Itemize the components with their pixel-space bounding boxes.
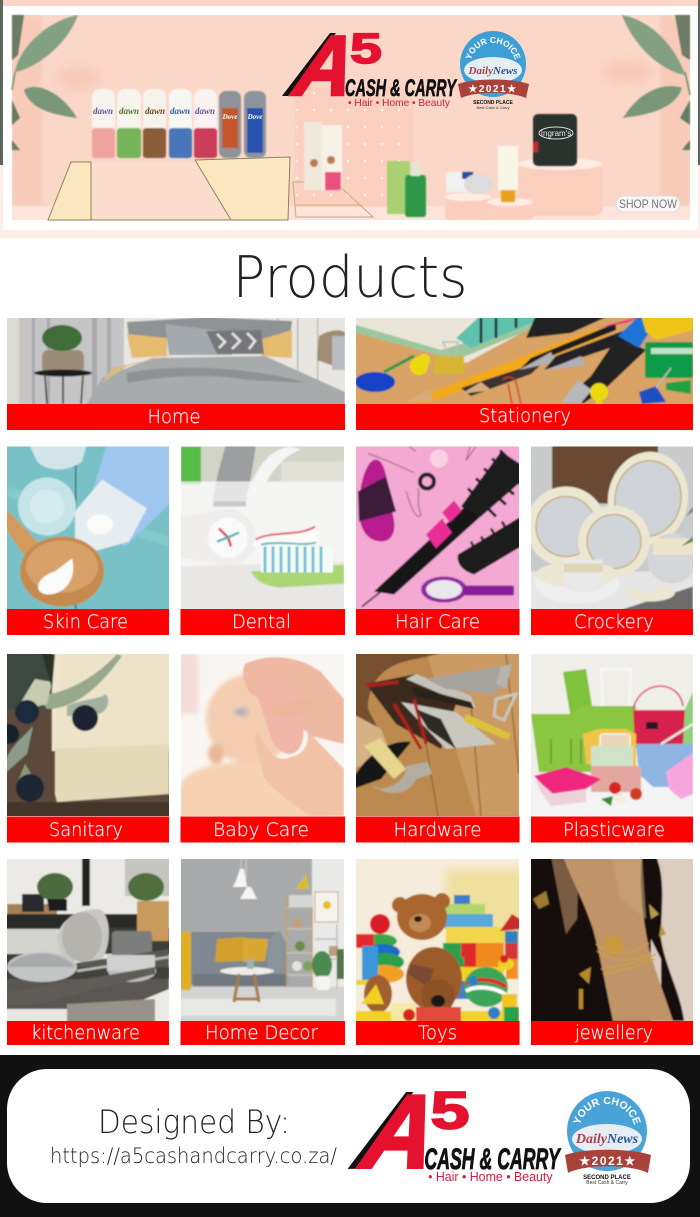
tile: Hair Care xyxy=(353,444,522,635)
label: Baby Care: Baby Care xyxy=(213,820,309,841)
photo: pots and pans xyxy=(7,859,169,1021)
logo: A5 Cash & Carry footer: • Hair • Home • Beauty xyxy=(428,1169,553,1184)
label: kitchenware xyxy=(7,1021,169,1045)
photo: living room xyxy=(181,859,344,1021)
label: Plasticware xyxy=(531,816,693,842)
bottle labels xyxy=(93,106,262,121)
label: Plasticware: Plasticware xyxy=(563,820,665,841)
tile: Dental xyxy=(178,444,347,635)
logo: A5 Cash & Carry xyxy=(281,19,457,114)
logo: A5 Cash & Carry: • Hair • Home • Beauty xyxy=(348,97,451,109)
tile: kitchenware xyxy=(4,856,172,1045)
logo: A5 Cash & Carry: 5 xyxy=(350,25,382,73)
logo: A5 Cash & Carry footer: CASH & CARRY xyxy=(424,1143,561,1176)
label: Stationery xyxy=(356,404,693,430)
label: Crockery: Crockery xyxy=(574,612,654,633)
bottles: dawn lotions xyxy=(92,89,266,158)
label: Home Decor xyxy=(180,1021,345,1045)
photo: toothpaste and brush xyxy=(181,446,344,609)
label: Sanitary: Sanitary xyxy=(49,820,123,841)
panel: hero banner xyxy=(0,0,700,238)
badge: your choice 2021: YOUR CHOICE xyxy=(465,37,521,60)
product: green cleanser xyxy=(387,161,426,217)
bottle labels: dawn xyxy=(93,106,113,116)
label: Toys xyxy=(356,1021,520,1045)
label: Toys: Toys xyxy=(418,1023,457,1044)
label: kitchenware: kitchenware xyxy=(31,1023,140,1044)
label: Dental: Dental xyxy=(232,612,291,633)
glass tray xyxy=(293,182,373,217)
label: jewellery xyxy=(531,1021,693,1045)
photo: dinner set xyxy=(531,446,693,609)
photo: baby foot in hands xyxy=(181,654,344,816)
display platforms xyxy=(48,157,290,220)
tile: Home Decor xyxy=(178,856,347,1045)
badge: your choice 2021 footer: Best Cash & Carry xyxy=(586,1180,628,1186)
logo: A5 Cash & Carry footer: 5 xyxy=(431,1083,470,1141)
tile: Crockery xyxy=(526,444,697,635)
icon: right leaves xyxy=(622,15,690,150)
label: Hair Care: Hair Care xyxy=(395,612,480,633)
frame xyxy=(3,6,698,230)
badge: your choice 2021 xyxy=(458,31,529,110)
label: Skin Care: Skin Care xyxy=(43,612,128,633)
badge: your choice 2021: Best Cash & Carry xyxy=(476,105,510,110)
logo: A5 Cash & Carry footer: A xyxy=(346,1074,459,1191)
bottle labels: dawn xyxy=(145,106,165,116)
bottle labels: dawn xyxy=(195,106,215,116)
tile: Hardware xyxy=(353,651,522,842)
label: Home Decor: Home Decor xyxy=(205,1023,318,1044)
photo: plastic containers xyxy=(531,654,693,816)
photo: pens and pencils xyxy=(356,318,693,404)
label: Skin Care xyxy=(7,609,169,635)
product: yellow tube xyxy=(498,146,518,202)
label: Hardware xyxy=(356,816,520,842)
badge: your choice 2021 footer: SECOND PLACE xyxy=(583,1175,631,1181)
product: Ingram's jar xyxy=(533,114,577,166)
logo: A5 Cash & Carry footer xyxy=(346,1074,561,1191)
label: Sanitary xyxy=(7,816,169,842)
badge: your choice 2021 footer: DailyNews xyxy=(575,1132,639,1147)
badge: your choice 2021 footer: YOUR CHOICE xyxy=(573,1097,641,1125)
label: Hardware: Hardware xyxy=(394,820,482,841)
tile: Sanitary xyxy=(0,651,172,842)
label: Crockery xyxy=(531,609,693,635)
tile: jewellery xyxy=(528,856,696,1045)
text: website URL: https://a5cashandcarry.co.za/ xyxy=(50,1144,337,1168)
label: Dental xyxy=(180,609,345,635)
peach cylinders xyxy=(445,158,603,220)
tile: Plasticware xyxy=(528,651,696,842)
bottle labels: dawn xyxy=(119,106,139,116)
logo: A5 Cash & Carry: A xyxy=(281,19,373,114)
label: Baby Care xyxy=(180,816,345,842)
label: Stationery: Stationery xyxy=(479,406,571,427)
icon: left leaves xyxy=(12,15,78,150)
panel: footer xyxy=(0,1055,700,1217)
tile: Home xyxy=(4,315,348,430)
tile: Toys xyxy=(353,856,526,1045)
tile: Skin Care xyxy=(4,444,172,635)
badge: your choice 2021 footer xyxy=(565,1091,651,1186)
bottle labels: dawn xyxy=(170,106,190,116)
product: soap xyxy=(446,172,492,194)
photo: teddy bear and blocks xyxy=(356,859,519,1021)
photo: hair tools xyxy=(356,446,519,609)
label: jewellery: jewellery xyxy=(574,1023,653,1044)
jar label: Ingram's xyxy=(541,129,571,138)
tile: Baby Care xyxy=(178,651,347,842)
badge: your choice 2021: SECOND PLACE xyxy=(473,100,514,106)
jar label xyxy=(539,127,573,139)
bottle labels: Dove xyxy=(247,113,262,121)
photo: soap and olives xyxy=(7,654,169,816)
logo: A5 Cash & Carry: CASH & CARRY xyxy=(345,75,457,102)
product: fairness cream boxes xyxy=(304,122,342,190)
badge: your choice 2021: DailyNews xyxy=(468,65,517,77)
tile: Stationery xyxy=(353,315,696,430)
button: shop now: SHOP NOW xyxy=(619,197,678,211)
badge: your choice 2021 footer: ★2021★ xyxy=(579,1154,637,1168)
photo: tools on wood xyxy=(356,654,519,816)
text: designed by: Designed By: xyxy=(98,1103,290,1141)
label: Home: Home xyxy=(148,407,200,428)
photo: bedroom xyxy=(7,318,345,404)
bottle labels: Dove xyxy=(222,113,237,121)
heading: Products: Products xyxy=(232,245,468,311)
label: Hair Care xyxy=(356,609,520,635)
pegboard xyxy=(295,87,413,207)
photo: gold bracelets on arm xyxy=(531,859,693,1021)
label: Home xyxy=(7,404,345,430)
badge: your choice 2021: ★2021★ xyxy=(468,84,518,95)
photo: lotion tube and spoon xyxy=(7,446,169,609)
